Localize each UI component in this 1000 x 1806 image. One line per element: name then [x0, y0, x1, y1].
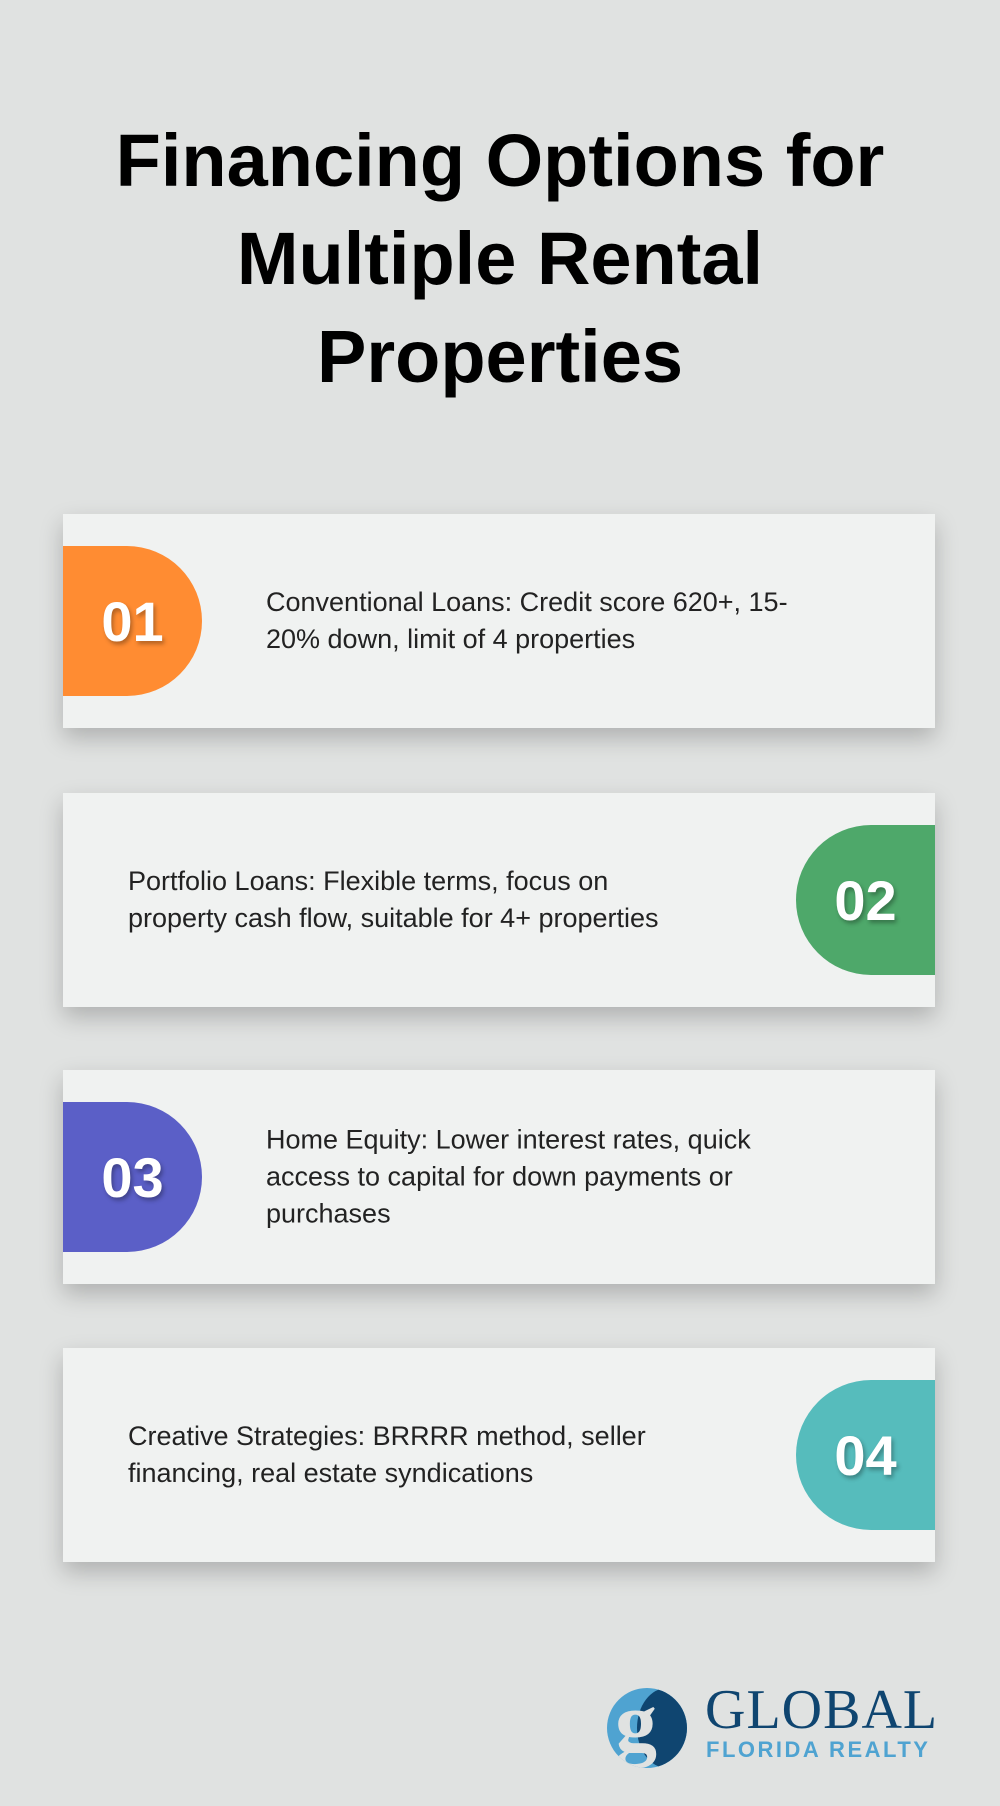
title: Financing Options for — [116, 119, 884, 202]
text 2: Portfolio Loans: Flexible terms, focus on property cash flow, suitable for 4+ properties — [128, 866, 659, 933]
text 4 — [128, 1421, 646, 1488]
card 2 — [63, 793, 935, 1007]
badge 04 — [796, 1380, 935, 1530]
title — [116, 119, 884, 398]
logo: FLORIDA REALTY — [706, 1737, 930, 1762]
text 4: Creative Strategies: BRRRR method, seller — [128, 1421, 646, 1451]
card 3 — [63, 1070, 935, 1284]
text 1: Conventional Loans: Credit score 620+, 15-20% down, limit of 4 properties — [266, 587, 788, 654]
badge 01 — [63, 546, 202, 696]
card 4 — [63, 1348, 935, 1562]
badge 02: 02 — [834, 868, 897, 932]
logo icon — [607, 1688, 687, 1768]
text 4: financing, real estate syndications — [128, 1458, 533, 1488]
text 3: purchases — [266, 1198, 391, 1228]
text 3: Home Equity: Lower interest rates, quick — [266, 1124, 751, 1154]
badge 01: 01 — [101, 590, 164, 652]
badge 02 — [796, 825, 935, 975]
title: Properties — [317, 315, 683, 398]
text 3: access to capital for down payments or — [266, 1162, 733, 1192]
badge 04: 04 — [834, 1424, 897, 1486]
title: Multiple Rental — [237, 217, 763, 300]
logo text: GLOBAL — [705, 1679, 938, 1741]
badge 03 — [63, 1102, 202, 1252]
badge 03: 03 — [101, 1146, 164, 1208]
card 1 — [63, 514, 935, 728]
text 3 — [266, 1124, 751, 1228]
logo — [607, 1679, 938, 1768]
